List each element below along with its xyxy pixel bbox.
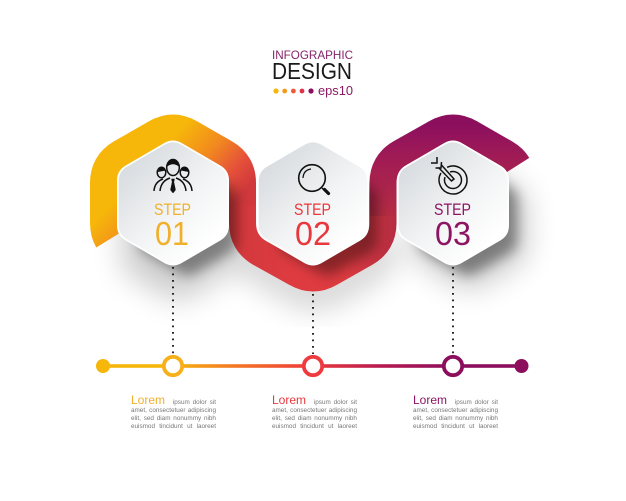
text block 3: adipiscing	[470, 406, 498, 414]
text block 1: adipiscing	[188, 406, 216, 414]
soft shadows under band and hexagons	[122, 164, 526, 300]
title block	[272, 48, 353, 98]
text block 1: Lorem	[131, 393, 165, 407]
text block 1: elit,	[131, 414, 141, 422]
text block 3: Lorem	[413, 393, 447, 407]
text block 3: sed	[426, 414, 436, 422]
marker 2	[304, 357, 322, 375]
text block 1: euismod	[131, 422, 155, 430]
step number: 01	[155, 215, 189, 252]
title block: INFOGRAPHIC	[272, 48, 353, 62]
text block 1: ipsum	[173, 398, 190, 406]
dotted connectors	[173, 267, 453, 354]
text block 3: tincidunt	[441, 422, 465, 430]
text block 1: dolor	[193, 398, 207, 406]
step label: STEP	[434, 200, 471, 219]
text block 3: diam	[439, 414, 452, 422]
text block 3: consectetuer	[431, 406, 467, 414]
step number: 02	[295, 215, 331, 252]
title block: DESIGN	[272, 58, 352, 84]
text block 1: ut	[187, 422, 192, 430]
text block 1: diam	[157, 414, 170, 422]
text block 3: elit,	[413, 414, 423, 422]
title block: eps10	[318, 83, 353, 98]
text block 2: amet,	[272, 406, 288, 414]
band segment: yellow to orange	[104, 128, 242, 253]
step 3 hexagon	[397, 140, 509, 266]
text block 2: adipiscing	[329, 406, 357, 414]
text block 1: laoreet	[197, 422, 216, 430]
text block 2	[272, 393, 357, 430]
text block 3: euismod	[413, 422, 437, 430]
text block 3: nibh	[486, 414, 498, 422]
text block 2: nonummy	[314, 414, 342, 422]
timeline start dot	[96, 359, 110, 373]
text block 3: dolor	[475, 398, 489, 406]
text block 2: euismod	[272, 422, 296, 430]
text block 3: amet,	[413, 406, 429, 414]
text block 3: sit	[492, 398, 498, 406]
text block 3	[413, 393, 498, 430]
timeline	[96, 357, 528, 375]
icon: target with arrow	[431, 157, 467, 194]
text block 2: laoreet	[338, 422, 357, 430]
step 2 hexagon	[257, 140, 369, 266]
text block 3: ipsum	[455, 398, 472, 406]
cast shadows on band	[139, 165, 517, 275]
text block 2: nibh	[345, 414, 357, 422]
text block 2: ipsum	[314, 398, 331, 406]
text block 1: sed	[144, 414, 154, 422]
text block 2: ut	[328, 422, 333, 430]
band segment: red valley	[242, 205, 383, 278]
step 1 hexagon	[117, 140, 229, 266]
text block 1: nonummy	[173, 414, 201, 422]
marker 3	[444, 357, 462, 375]
step label: STEP	[154, 200, 191, 219]
text block 2: dolor	[334, 398, 348, 406]
text block 3: ut	[469, 422, 474, 430]
text block 2: diam	[298, 414, 311, 422]
text block 1: sit	[210, 398, 216, 406]
step label: STEP	[294, 200, 331, 219]
text block 3: nonummy	[455, 414, 483, 422]
text block 1: nibh	[204, 414, 216, 422]
step number: 03	[435, 215, 471, 252]
text block 2: tincidunt	[300, 422, 324, 430]
text block 1: amet,	[131, 406, 147, 414]
text block 2: Lorem	[272, 393, 306, 407]
text block 1: consectetuer	[149, 406, 185, 414]
ribbon band	[104, 128, 522, 278]
text block 2: sit	[351, 398, 357, 406]
text block 3: laoreet	[479, 422, 498, 430]
icon: team of people	[154, 160, 192, 193]
band segment: crimson to purple	[383, 128, 522, 216]
text block 1	[131, 393, 216, 430]
text block 2: sed	[285, 414, 295, 422]
marker 1	[164, 357, 182, 375]
icon: magnifier	[299, 165, 328, 194]
timeline end dot	[514, 359, 528, 373]
text block 2: elit,	[272, 414, 282, 422]
text block 1: tincidunt	[159, 422, 183, 430]
text block 2: consectetuer	[290, 406, 326, 414]
